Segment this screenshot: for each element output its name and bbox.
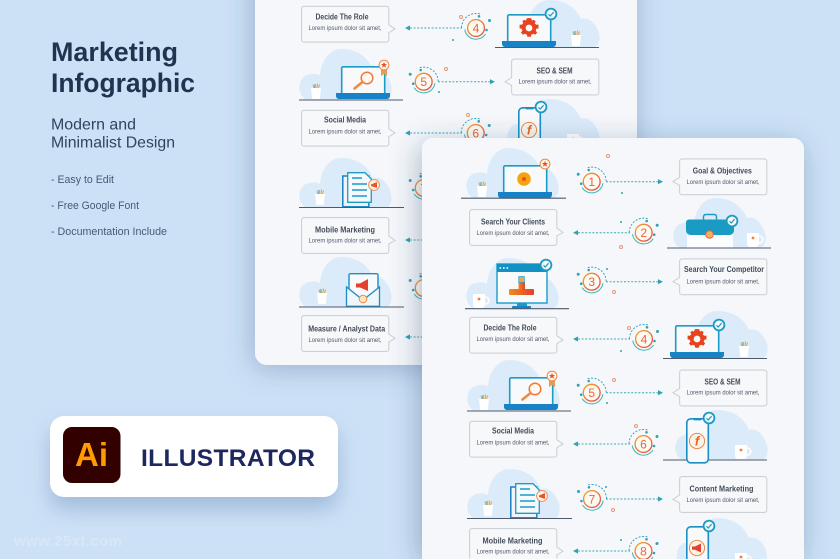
panel: front infographic sheet [422,138,804,559]
title: Infographic [51,68,195,98]
row 3: search your competitor: Lorem ipsum dolor sit amet, [686,279,760,286]
panel: back infographic sheet [255,0,637,365]
icon: adobe illustrator: Ai [75,436,108,473]
back row 10: measure and analyst data: Lorem ipsum dolor sit amet, [308,337,382,344]
back row 10: measure and analyst data [302,316,462,351]
badge label: ILLUSTRATOR [141,445,315,472]
back row 4: decide the role: Decide The Role [316,13,369,22]
row 5: seo and sem: 5 [588,386,595,400]
row 1: goal and objectives [461,148,767,198]
back row 8: mobile marketing: Mobile Marketing [315,225,375,234]
row 7: content marketing: 7 [589,492,596,506]
row 6: social media: Lorem ipsum dolor sit amet, [476,439,550,446]
row 6: social media: 6 [640,437,647,451]
subtitle: Modern and [51,116,136,134]
feature list: - Free Google Font [51,200,139,212]
row 7: content marketing: Content Marketing [690,485,754,494]
watermark: www.25xt.com [13,533,122,550]
back row 10: measure and analyst data: Measure / Analyst Data [308,325,386,334]
row 2: search your clients: 2 [640,226,647,240]
back row 4: decide the role: Lorem ipsum dolor sit amet, [308,25,382,32]
row 5: seo and sem [467,360,767,411]
back row 5: seo and sem: Lorem ipsum dolor sit amet, [518,79,592,86]
row 4: decide the role [470,311,768,358]
row 3: search your competitor: Search Your Competitor [684,265,764,274]
row 7: content marketing: Lorem ipsum dolor sit amet, [686,497,760,504]
row 5: seo and sem: SEO & SEM [704,378,741,387]
row 8: mobile marketing: 8 [640,544,647,558]
subtitle: Minimalist Design [51,134,175,152]
feature list [51,174,167,238]
back row 9: envelope illustration [299,257,438,307]
back row 4: decide the role [302,0,600,48]
row 8: mobile marketing [470,518,767,559]
row 6: social media: Social Media [492,427,534,436]
row 2: search your clients: Search Your Clients [481,218,545,227]
feature list: - Easy to Edit [51,174,114,186]
back row 6: social media: Social Media [324,116,366,125]
row 1: goal and objectives: Goal & Objectives [693,167,752,176]
row 6: social media [470,410,768,463]
row 1: goal and objectives: Lorem ipsum dolor sit amet, [686,179,760,186]
back row 8: mobile marketing: Lorem ipsum dolor sit amet, [308,238,382,245]
row 4: decide the role: Lorem ipsum dolor sit amet, [476,336,550,343]
row 8: mobile marketing: Lorem ipsum dolor sit amet, [476,549,550,556]
back row 7: document illustration: 7 [420,181,427,195]
back row 6: social media [302,99,600,152]
row 3: search your competitor: 3 [588,275,595,289]
back row 8: mobile marketing [302,218,462,253]
back row 7: document illustration [299,158,438,208]
row 7: content marketing [467,469,767,519]
subtitle [51,116,175,152]
row 4: decide the role: 4 [641,332,648,346]
icon: adobe illustrator [63,427,120,483]
row 2: search your clients: Lorem ipsum dolor sit amet, [476,230,550,237]
row 4: decide the role: Decide The Role [484,324,537,333]
row 1: goal and objectives: 1 [588,175,595,189]
illustrator badge [50,416,338,497]
title [51,37,195,98]
row 3: search your competitor [465,258,767,309]
feature list: - Documentation Include [51,226,167,238]
title: Marketing [51,37,178,67]
back row 6: social media: 6 [472,126,479,140]
back row 4: decide the role: 4 [473,21,480,35]
back row 6: social media: Lorem ipsum dolor sit amet, [308,128,382,135]
back row 5: seo and sem: 5 [420,75,427,89]
back row 5: seo and sem: SEO & SEM [536,66,573,76]
row 8: mobile marketing: Mobile Marketing [482,536,543,545]
row 5: seo and sem: Lorem ipsum dolor sit amet, [686,390,760,397]
row 2: search your clients [470,198,771,248]
back row 5: seo and sem [299,49,599,100]
